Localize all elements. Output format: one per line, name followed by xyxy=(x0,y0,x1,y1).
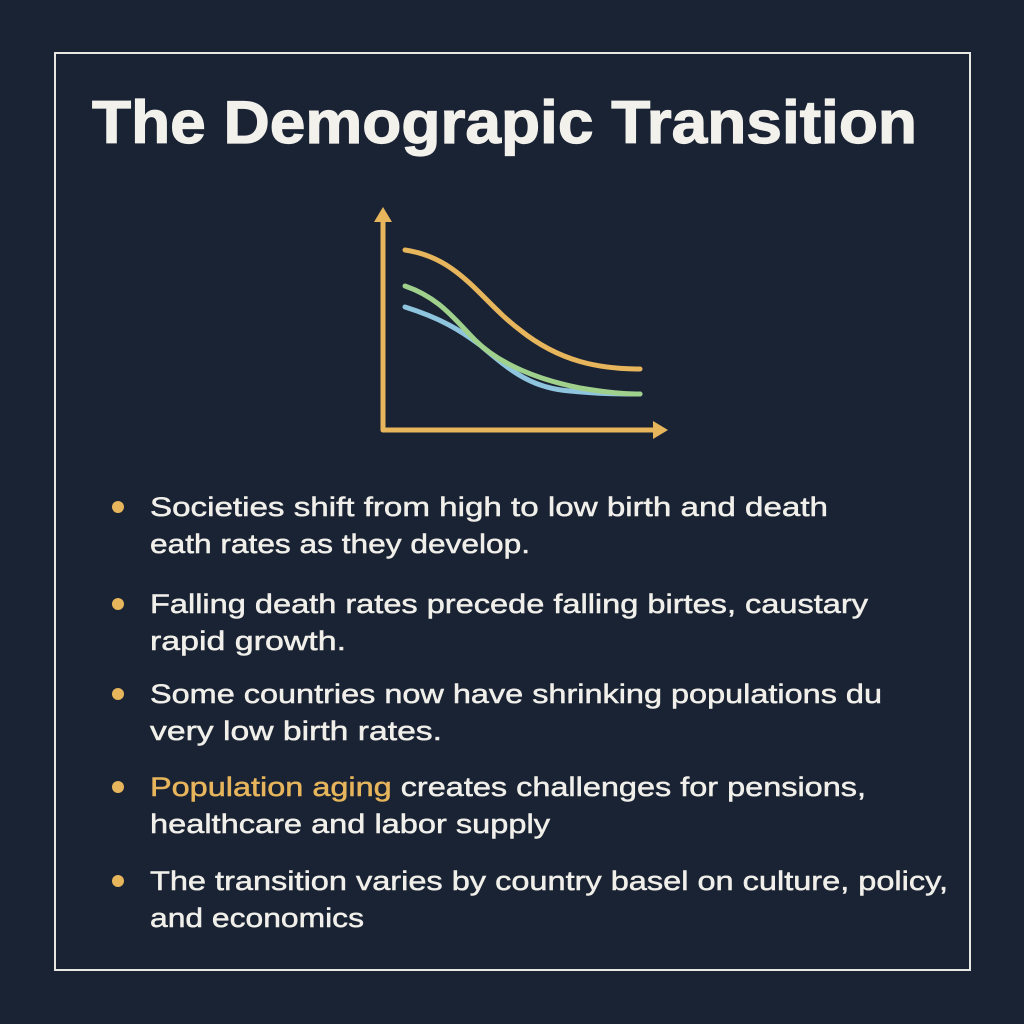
bullet list xyxy=(112,492,948,933)
bullet 2 xyxy=(112,589,869,656)
bullet 2: Falling death rates precede falling birtes, caustary xyxy=(150,589,869,619)
bullet 5: The transition varies by country basel on culture, policy, xyxy=(150,866,948,896)
chart: demographic transition xyxy=(374,207,668,439)
bullet 3: very low birth rates. xyxy=(150,716,442,746)
bullet 3: Some countries now have shrinking populations du xyxy=(150,679,882,709)
bullet 4 xyxy=(112,772,866,839)
bullet 4: Population aging creates challenges for pensions, xyxy=(150,772,866,802)
bullet 1: Societies shift from high to low birth and death xyxy=(150,492,828,522)
bullet 5: and economics xyxy=(150,903,364,933)
title: The Demograpic Transition xyxy=(92,89,917,156)
bullet 5 xyxy=(112,866,948,933)
bullet 3 xyxy=(112,679,882,746)
line: green xyxy=(405,286,640,394)
line: orange xyxy=(405,250,640,369)
bullet 1 xyxy=(112,492,828,559)
bullet 4: healthcare and labor supply xyxy=(150,809,551,839)
bullet 1: eath rates as they develop. xyxy=(150,529,530,559)
bullet 2: rapid growth. xyxy=(150,626,346,656)
line: blue xyxy=(405,307,640,394)
axes xyxy=(374,207,668,439)
